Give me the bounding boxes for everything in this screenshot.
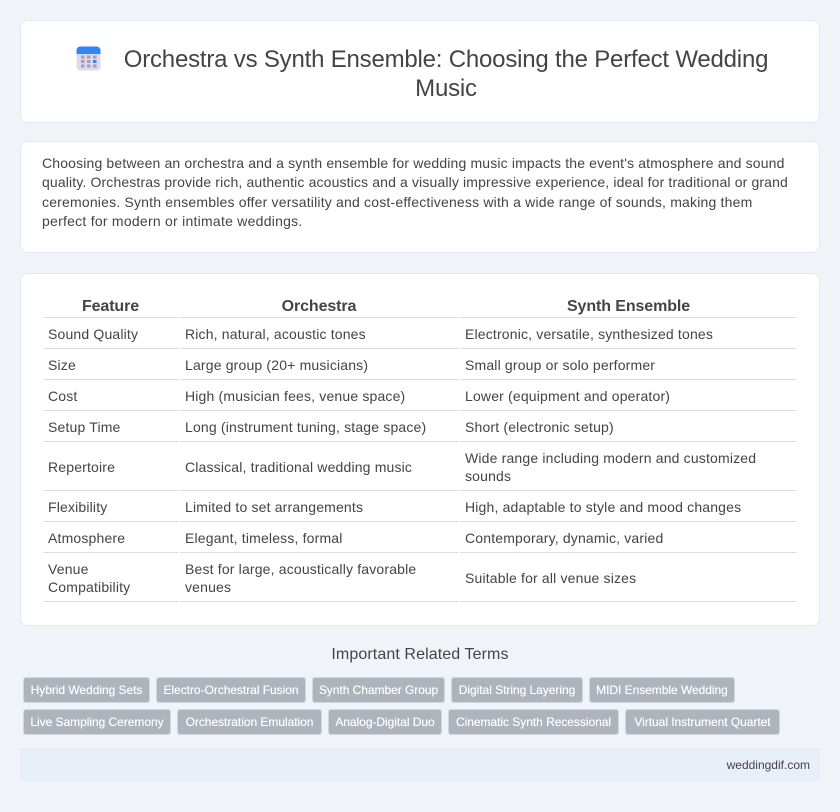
- cell: Classical, traditional wedding music: [185, 459, 412, 475]
- cell: High (musician fees, venue space): [185, 388, 405, 404]
- intro text: Choosing between an orchestra and a synth ensemble for wedding music impacts the event's atmosphere and sound: [42, 154, 785, 170]
- intro text: [42, 154, 788, 229]
- tag: [589, 677, 735, 703]
- table header: Orchestra: Orchestra: [282, 298, 356, 315]
- footer: weddingdif.com: [727, 758, 810, 772]
- tag: MIDI Ensemble Wedding: [596, 683, 728, 697]
- cell: Wide range including modern and customized: [465, 450, 756, 466]
- row: Venue Compatibility: Venue: [48, 561, 89, 577]
- related terms heading: Important Related Terms: [331, 646, 509, 663]
- panel: title card: [20, 20, 820, 123]
- tag: Orchestration Emulation: [186, 715, 313, 729]
- tag: [312, 677, 445, 703]
- row: Sound Quality: Sound Quality: [48, 326, 138, 342]
- cell: Small group or solo performer: [465, 357, 655, 373]
- tag: Digital String Layering: [459, 683, 575, 697]
- table header: Feature: Feature: [82, 298, 139, 315]
- tag: Cinematic Synth Recessional: [456, 715, 611, 729]
- cell: Lower (equipment and operator): [465, 388, 670, 404]
- tag: Virtual Instrument Quartet: [634, 715, 771, 729]
- cell: sounds: [465, 468, 511, 484]
- row: Atmosphere: Atmosphere: [48, 530, 125, 546]
- tag: [451, 677, 583, 703]
- panel: introduction: [20, 141, 820, 253]
- tag: [23, 709, 171, 735]
- icon: calendar: [76, 46, 100, 70]
- row: Size: Size: [48, 357, 76, 373]
- tag: [23, 677, 150, 703]
- tag: Analog-Digital Duo: [335, 715, 435, 729]
- footer: [20, 748, 820, 782]
- tag: [448, 709, 619, 735]
- title: Orchestra vs Synth Ensemble: Choosing the Perfect Wedding: [124, 46, 768, 73]
- cell: venues: [185, 579, 231, 595]
- cell: Elegant, timeless, formal: [185, 530, 343, 546]
- cell: [465, 450, 756, 484]
- tag: Hybrid Wedding Sets: [31, 683, 142, 697]
- cell: High, adaptable to style and mood changes: [465, 499, 741, 515]
- title: Music: [415, 75, 477, 102]
- intro text: quality. Orchestras provide rich, authentic acoustics and a visually impressive experience, ideal for traditional or grand: [42, 174, 788, 190]
- panel: comparison table: [20, 273, 820, 626]
- row: Venue Compatibility: Compatibility: [48, 579, 130, 595]
- cell: Long (instrument tuning, stage space): [185, 419, 426, 435]
- tag: [625, 709, 780, 735]
- cell: Rich, natural, acoustic tones: [185, 326, 366, 342]
- table header: Synth Ensemble: Synth Ensemble: [567, 298, 690, 315]
- cell: Limited to set arrangements: [185, 499, 363, 515]
- row: Venue Compatibility: [48, 561, 130, 595]
- intro text: ceremonies. Synth ensembles offer versatility and cost-effectiveness with a wide range of sounds, making them: [42, 194, 752, 210]
- row: Flexibility: Flexibility: [48, 499, 107, 515]
- intro text: perfect for modern or intimate weddings.: [42, 213, 303, 229]
- tag: [328, 709, 442, 735]
- cell: [185, 561, 416, 595]
- row: Repertoire: Repertoire: [48, 459, 115, 475]
- cell: Large group (20+ musicians): [185, 357, 368, 373]
- title: [124, 46, 768, 102]
- cell: Suitable for all venue sizes: [465, 570, 636, 586]
- cell: Best for large, acoustically favorable: [185, 561, 416, 577]
- tag: Synth Chamber Group: [319, 683, 438, 697]
- tag: [177, 709, 322, 735]
- cell: Short (electronic setup): [465, 419, 614, 435]
- tag: Live Sampling Ceremony: [30, 715, 164, 729]
- tag: Electro-Orchestral Fusion: [163, 683, 299, 697]
- tag: [156, 677, 306, 703]
- cell: Contemporary, dynamic, varied: [465, 530, 663, 546]
- row: Cost: Cost: [48, 388, 77, 404]
- cell: Electronic, versatile, synthesized tones: [465, 326, 713, 342]
- row: Setup Time: Setup Time: [48, 419, 121, 435]
